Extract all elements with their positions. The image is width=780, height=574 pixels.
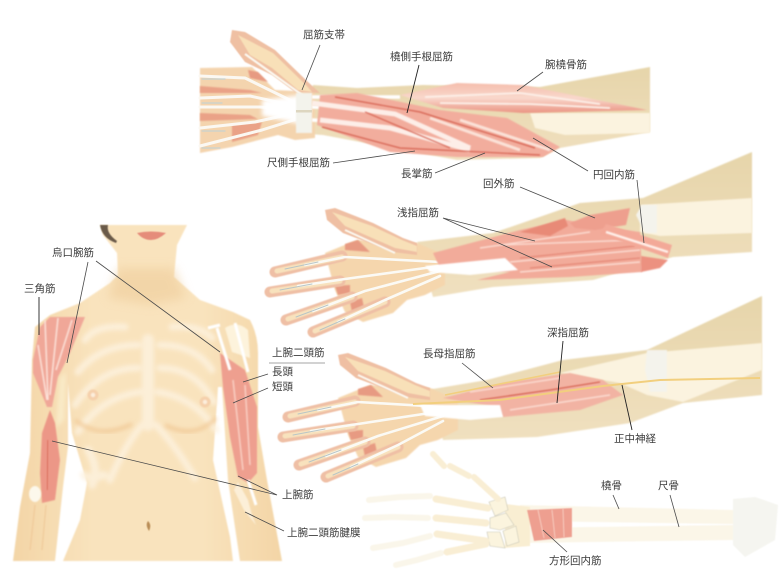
wrist cap (505, 504, 530, 548)
label: coracobrachialis (52, 246, 220, 363)
label: supinator (483, 177, 595, 218)
label: ulna (658, 480, 679, 527)
brachioradialis muscle (400, 83, 647, 113)
hair (100, 225, 117, 243)
label: deltoid: 三角筋 (24, 282, 56, 295)
label: pronator quadratus (543, 530, 602, 567)
elbow bone left (29, 486, 41, 502)
biceps right arm (220, 353, 257, 483)
label: biceps brachii (269, 346, 325, 363)
muscle fibres (470, 378, 610, 410)
thumb (338, 353, 430, 400)
panel: forearm deep muscles (lower) (283, 296, 762, 477)
label: short head: 短頭 (272, 380, 293, 393)
finger bones (365, 496, 488, 565)
palm (338, 385, 458, 467)
label: coracobrachialis: 烏口腕筋 (52, 246, 94, 259)
shoulder bone right (225, 324, 250, 358)
label: flexor digitorum superficialis (397, 206, 552, 267)
label: flexor digitorum profundus: 深指屈筋 (547, 326, 589, 339)
label: brachioradialis: 腕橈骨筋 (545, 58, 587, 71)
label: bicipital aponeurosis (245, 512, 361, 539)
fingers (270, 256, 385, 332)
label: radius: 橈骨 (601, 480, 622, 492)
flexor digitorum profundus muscle (443, 373, 623, 417)
palm white centre (262, 95, 300, 124)
icon: nipples (88, 390, 210, 408)
label: bicipital aponeurosis: 上腕二頭筋腱膜 (287, 526, 361, 539)
breast shadows (75, 418, 216, 431)
label: pronator quadratus: 方形回内筋 (549, 554, 602, 567)
forearm flexor muscles (317, 93, 560, 157)
label: palmaris longus (401, 153, 485, 180)
label: flexor pollicis longus (423, 347, 493, 388)
label: median nerve: 正中神経 (614, 432, 656, 445)
white tendons and fibres (312, 103, 470, 150)
elbow bone (733, 497, 778, 557)
left forearm tendons (30, 505, 46, 550)
tendons (293, 402, 443, 475)
carpal bones (487, 497, 519, 548)
label: flexor retinaculum: 屈筋支帯 (303, 28, 345, 41)
lips (137, 232, 166, 240)
finger tendons (200, 76, 300, 148)
forearm tendon area right (234, 482, 256, 525)
thumb (230, 30, 320, 93)
bone (640, 198, 752, 236)
finger muscle patches (200, 86, 262, 142)
arm skin (417, 152, 752, 297)
pronator teres cut muscle (600, 224, 672, 258)
hand (283, 353, 458, 477)
neck and chest shading (108, 268, 186, 305)
label: brachialis (52, 441, 314, 501)
web and palm muscle (335, 240, 370, 312)
web of thumb (248, 70, 268, 82)
muscle dark streak (480, 382, 600, 400)
label: pronator teres (533, 138, 644, 243)
flexor retinaculum (296, 93, 312, 133)
lower cut muscle (641, 256, 668, 272)
panel: torso front view with upper arm muscles (13, 225, 282, 561)
panel: bones of forearm and hand (365, 454, 778, 565)
biceps tendons (208, 323, 256, 505)
long flexor tendon line (445, 372, 560, 395)
label: flexor carpi ulnaris (267, 151, 415, 169)
bone (530, 113, 650, 135)
label: median nerve (614, 385, 656, 445)
thumb (325, 208, 417, 255)
label: palmaris longus: 長掌筋 (401, 167, 432, 180)
elbow joint (636, 205, 657, 233)
cream strip beside deltoid (56, 372, 66, 428)
tendons and fibres (425, 258, 518, 275)
tendons (280, 257, 440, 330)
label: short head (233, 380, 293, 403)
cut muscle piece (520, 218, 568, 236)
label: supinator: 回外筋 (483, 177, 514, 190)
body silhouette (13, 225, 282, 561)
label: flexor digitorum superficialis: 浅指屈筋 (397, 206, 439, 219)
label: pronator teres: 円回内筋 (593, 168, 635, 181)
label: deltoid (24, 282, 56, 335)
label: biceps brachii: 上腕二頭筋 (272, 346, 324, 359)
hand (270, 208, 445, 332)
white tendon (420, 405, 503, 420)
label: long head (243, 366, 293, 382)
panel: forearm intermediate muscles (middle) (270, 152, 752, 332)
fingers (283, 401, 398, 477)
label: flexor carpi radialis (390, 50, 453, 113)
label: brachialis: 上腕筋 (282, 488, 314, 501)
label: flexor carpi radialis: 橈側手根屈筋 (390, 50, 453, 63)
label: flexor retinaculum (302, 28, 345, 90)
arm skin (427, 296, 762, 440)
deltoid and upper arm muscle (33, 317, 85, 407)
rib cage (75, 327, 216, 485)
label: ulna: 尺骨 (658, 480, 679, 492)
supinator muscle (570, 208, 630, 230)
navel (147, 521, 150, 531)
brachialis left arm (40, 410, 60, 503)
palm (325, 240, 445, 322)
web and palm muscle (348, 385, 383, 457)
flexor digitorum superficialis muscle (433, 220, 642, 280)
label: flexor carpi ulnaris: 尺側手根屈筋 (267, 156, 330, 169)
pronator quadratus muscle (527, 508, 572, 541)
panel: forearm superficial muscles (top) (200, 30, 650, 160)
hand (200, 67, 315, 153)
arm skin (293, 67, 650, 160)
clavicle band (55, 314, 235, 318)
label: flexor pollicis longus: 長母指屈筋 (423, 347, 476, 360)
tendons to forearm (312, 97, 400, 124)
label: flexor digitorum profundus (547, 326, 589, 403)
elbow joint (645, 350, 667, 392)
label: radius (601, 480, 622, 509)
ulna bone (520, 525, 733, 543)
median nerve (413, 378, 760, 404)
radius bone (520, 505, 733, 524)
label: brachioradialis (517, 58, 587, 91)
label: long head: 長頭 (272, 366, 293, 378)
bone (560, 343, 762, 402)
thumb bones (433, 454, 498, 499)
